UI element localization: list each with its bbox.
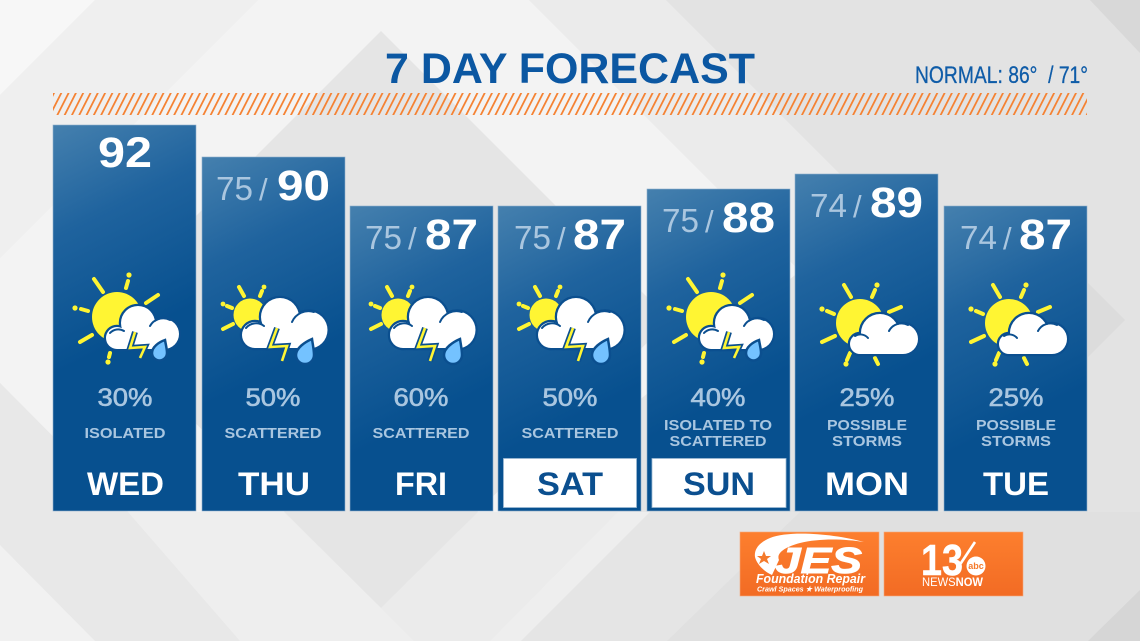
icon: sun with storm cloud [72, 272, 179, 365]
condition: STORMS [981, 433, 1051, 450]
temperatures: 75 [662, 202, 699, 239]
precipitation chance: 50% [542, 384, 598, 412]
precipitation chance: 40% [690, 384, 746, 412]
temperatures: 75 [216, 170, 253, 207]
icon: sun with storm cloud [666, 272, 773, 365]
temperatures: 74 [810, 187, 847, 224]
temperatures: / [853, 189, 862, 224]
logo: JES Foundation Repair: Crawl Spaces ★ Waterproofing [757, 584, 863, 594]
temperatures: 87 [425, 211, 478, 259]
temperatures: 75 [365, 219, 402, 256]
temperatures: 75 [514, 219, 551, 256]
temperatures: 90 [277, 162, 330, 210]
condition: POSSIBLE [827, 417, 907, 434]
logo: 13 News Now [884, 532, 1023, 596]
day highlight [652, 458, 786, 508]
temperatures [810, 179, 923, 227]
logo: JES Foundation Repair: Foundation Repair [756, 572, 866, 586]
panel: SUN [647, 189, 790, 511]
day: MON [825, 466, 909, 502]
precipitation chance: 50% [246, 384, 300, 412]
temperatures [216, 162, 330, 210]
condition: SCATTERED [670, 433, 767, 450]
condition: ISOLATED [84, 425, 166, 442]
day highlight [504, 458, 636, 508]
icon: sun with cloud [819, 282, 918, 367]
temperatures [365, 211, 478, 259]
condition: POSSIBLE [976, 417, 1056, 434]
panel: WED [53, 125, 196, 511]
temperatures: 88 [722, 194, 775, 242]
day: WED [87, 466, 164, 502]
panel: THU [202, 157, 345, 511]
precipitation chance: 25% [840, 384, 894, 412]
temperatures [514, 211, 626, 259]
temperatures: / [1003, 221, 1012, 256]
temperatures: / [408, 221, 417, 256]
logo: JES Foundation Repair: JES [775, 540, 862, 581]
precipitation chance: 30% [98, 384, 152, 412]
panel: TUE [944, 206, 1087, 511]
day: SAT [537, 466, 603, 502]
panel: FRI [350, 206, 493, 511]
temperatures: / [705, 204, 714, 239]
condition [827, 417, 907, 450]
icon: sun with storm cloud [221, 285, 328, 364]
icon: sun with cloud [968, 282, 1067, 367]
temperatures: 87 [573, 211, 626, 259]
temperatures: 74 [960, 219, 997, 256]
condition: SCATTERED [522, 425, 619, 442]
logo: JES Foundation Repair [740, 532, 879, 596]
temperatures: / [259, 172, 268, 207]
high temperature: 92 [98, 129, 152, 177]
temperatures: / [557, 221, 566, 256]
condition: SCATTERED [372, 425, 470, 442]
orange hatched divider [53, 93, 1087, 115]
temperatures: 89 [870, 179, 923, 227]
normal temperatures: NORMAL: 86° / 71° [915, 62, 1088, 89]
title: 7 DAY FORECAST [385, 45, 755, 93]
condition: STORMS [832, 433, 902, 450]
precipitation chance: 60% [394, 384, 448, 412]
panel: SAT [498, 206, 641, 511]
temperatures [662, 194, 775, 242]
condition: SCATTERED [224, 425, 322, 442]
temperatures: 87 [1019, 211, 1072, 259]
day: TUE [983, 466, 1049, 502]
day: FRI [395, 466, 447, 502]
logo: 13 News Now: 13 [921, 536, 963, 585]
day: THU [238, 466, 310, 502]
icon: sun with storm cloud [369, 285, 476, 364]
logo: 13 News Now: NEWSNOW [922, 577, 983, 589]
day: SUN [683, 466, 755, 502]
precipitation chance: 25% [988, 384, 1044, 412]
temperatures [960, 211, 1072, 259]
icon: sun with storm cloud [517, 285, 624, 364]
condition: ISOLATED TO [664, 417, 772, 434]
condition [976, 417, 1056, 450]
condition [664, 417, 772, 450]
panel: MON [795, 174, 938, 511]
logo: 13 News Now: abc [968, 561, 984, 571]
